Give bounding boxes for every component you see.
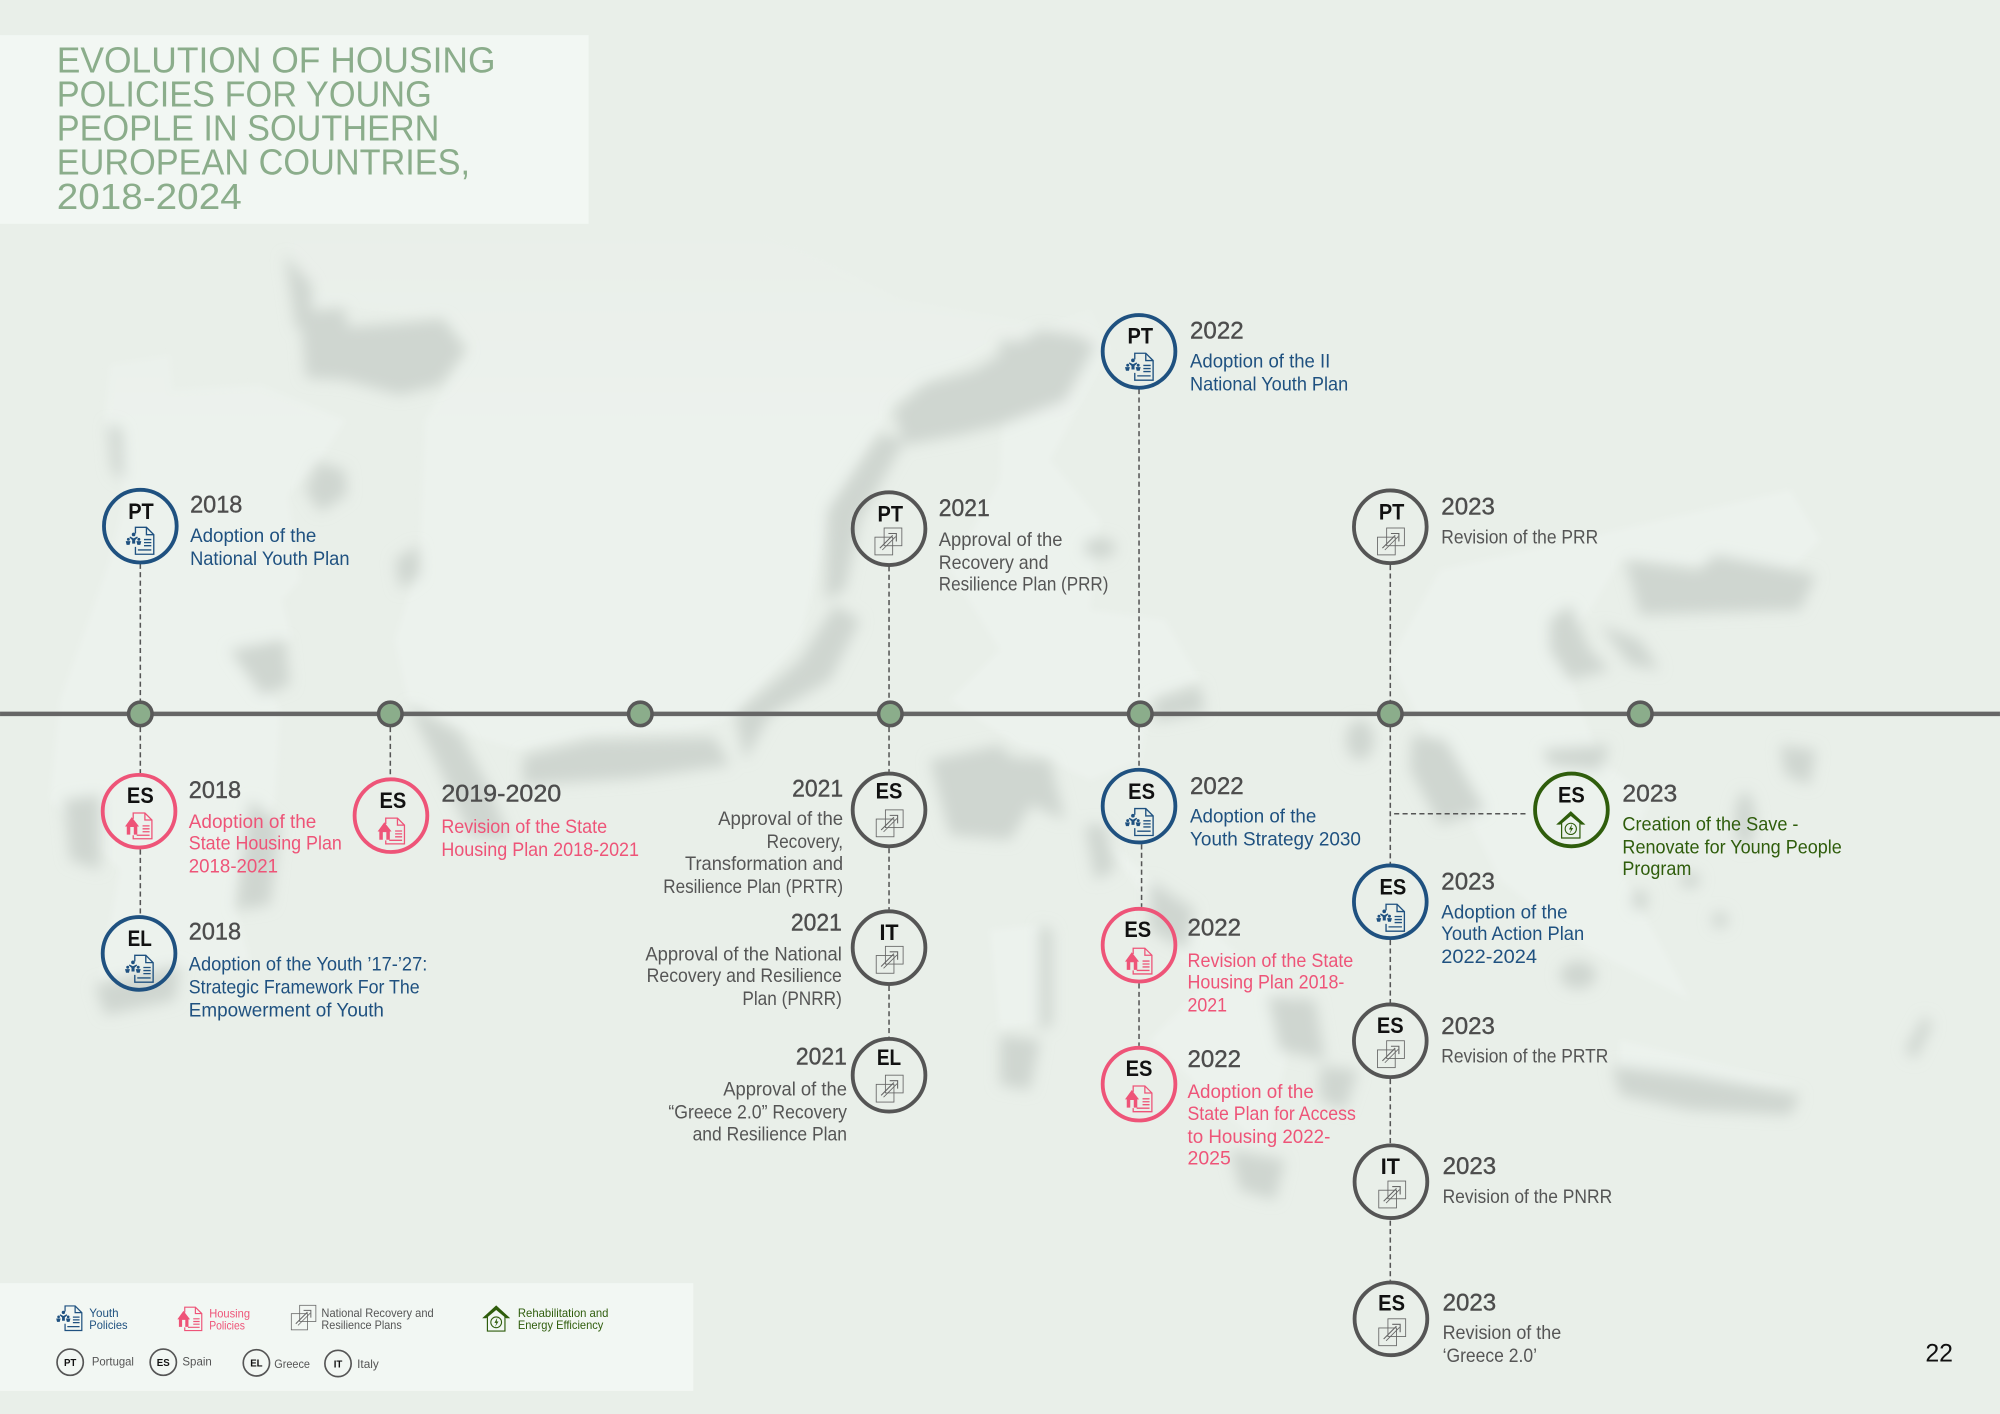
event: PT 2021: Recovery and — [939, 552, 1048, 574]
event: ES 2023 youth action plan: 2022-2024 — [1441, 946, 1537, 968]
title: PEOPLE IN SOUTHERN — [57, 109, 439, 149]
event: IT 2021: 2021 — [791, 909, 842, 936]
event: PT 2023: Revision of the PRR — [1441, 526, 1598, 548]
event: IT 2021: Plan (PNRR) — [742, 988, 842, 1010]
legend: housing policies: Policies — [209, 1319, 245, 1333]
event: EL 2018 — [103, 917, 427, 1022]
event: PT 2018: 2018 — [190, 492, 242, 519]
event: PT 2023: 2023 — [1441, 494, 1495, 521]
legend: Greece: EL — [250, 1359, 263, 1370]
event: ES 2021: Recovery, — [767, 831, 843, 853]
legend: rehabilitation and energy efficiency — [482, 1305, 609, 1332]
event: ES 2022 plan for access: to Housing 2022- — [1187, 1126, 1330, 1148]
legend: youth policies — [56, 1306, 128, 1332]
event: ES 2022 plan for access: ES — [1126, 1056, 1153, 1081]
event: ES 2023 youth action plan: Youth Action Plan — [1441, 923, 1584, 945]
legend: national recovery and resilience plans: Resilience Plans — [321, 1318, 402, 1332]
event: IT 2021: IT — [879, 920, 899, 945]
event: ES 2023 Save-Renovate: 2023 — [1622, 781, 1677, 808]
legend: Italy: IT — [334, 1359, 342, 1370]
event: ES 2018 housing plan: State Housing Plan — [189, 832, 342, 854]
event: ES 2023 revision Greece 2.0: ES — [1378, 1291, 1405, 1316]
legend: Portugal — [57, 1349, 134, 1375]
event: ES 2019-2020: Housing Plan 2018-2021 — [441, 839, 639, 861]
event: ES 2022 plan for access: 2022 — [1187, 1046, 1241, 1073]
legend: Spain: Spain — [182, 1354, 212, 1368]
event: PT 2022: PT — [1128, 324, 1153, 349]
event: EL 2021: 2021 — [796, 1043, 847, 1070]
title: EUROPEAN COUNTRIES, — [57, 143, 470, 183]
legend: Greece — [243, 1350, 310, 1376]
legend: rehabilitation and energy efficiency: Energy Efficiency — [518, 1318, 604, 1332]
event: ES 2021: 2021 — [792, 776, 843, 803]
legend: housing policies — [177, 1307, 250, 1333]
event: ES 2023 revision Greece 2.0 — [1355, 1282, 1561, 1367]
legend: Italy: Italy — [357, 1357, 380, 1371]
title: 2018-2024 — [57, 177, 242, 217]
event: ES 2023 revision Greece 2.0: ‘Greece 2.0’ — [1443, 1345, 1537, 1367]
event: PT 2022: Adoption of the II — [1190, 350, 1330, 372]
event: ES 2022 youth strategy: 2022 — [1190, 773, 1244, 800]
event: PT 2021: PT — [878, 502, 903, 527]
title — [57, 41, 496, 217]
legend: national recovery and resilience plans: National Recovery and — [321, 1306, 434, 1320]
event: ES 2022 revision housing plan: Housing Plan 2018- — [1187, 971, 1344, 993]
legend: housing policies: Housing — [209, 1307, 250, 1321]
event: PT 2022: National Youth Plan — [1190, 373, 1348, 395]
event: ES 2018 housing plan: ES — [127, 783, 154, 808]
event: ES 2019-2020: 2019-2020 — [441, 781, 561, 808]
event: PT 2018: National Youth Plan — [190, 548, 350, 570]
event: ES 2023 youth action plan: ES — [1379, 875, 1406, 900]
event: PT 2018: Adoption of the — [190, 525, 316, 547]
event: ES 2023 revision Greece 2.0: 2023 — [1443, 1290, 1496, 1317]
event: EL 2021: EL — [877, 1045, 901, 1070]
event: ES 2023 Save-Renovate: Renovate for Young People — [1622, 836, 1842, 858]
event: ES 2021: Approval of the — [718, 808, 843, 830]
event: ES 2023 revision Greece 2.0: Revision of the — [1443, 1322, 1561, 1344]
event: PT 2021 — [853, 492, 1108, 596]
event: ES 2022 revision housing plan: Revision of the State — [1187, 950, 1353, 972]
event: IT 2021 — [645, 909, 925, 1010]
timeline nodes — [129, 702, 1652, 726]
event: ES 2022 revision housing plan: 2021 — [1187, 994, 1227, 1016]
title: EVOLUTION OF HOUSING — [57, 41, 496, 81]
event: ES 2022 revision housing plan: ES — [1124, 917, 1151, 942]
event: IT 2023: Revision of the PNRR — [1443, 1186, 1612, 1208]
event: ES 2022 youth strategy: Adoption of the — [1190, 806, 1316, 828]
timeline axis — [0, 702, 2000, 726]
legend: Spain — [150, 1349, 212, 1375]
event: PT 2023: PT — [1379, 500, 1405, 525]
title: POLICIES FOR YOUNG — [57, 75, 432, 115]
event: IT 2023: 2023 — [1443, 1153, 1496, 1180]
event: PT 2022 — [1103, 315, 1348, 395]
legend: rehabilitation and energy efficiency: Rehabilitation and — [518, 1306, 609, 1320]
event: ES 2019-2020: ES — [379, 788, 406, 813]
event: ES 2022 youth strategy: Youth Strategy 2030 — [1190, 829, 1361, 851]
event: ES 2019-2020: Revision of the State — [441, 816, 607, 838]
legend: Portugal: PT — [64, 1358, 76, 1369]
event: ES 2023 revision PRTR — [1354, 1004, 1608, 1077]
event: ES 2018 housing plan: 2018 — [189, 777, 241, 804]
event: ES 2023 revision PRTR: Revision of the PRTR — [1441, 1045, 1608, 1067]
event: EL 2018: EL — [128, 926, 152, 951]
event: PT 2022: 2022 — [1190, 318, 1244, 345]
event: ES 2019-2020 — [355, 779, 639, 861]
legend: Spain: ES — [157, 1358, 170, 1369]
event: ES 2018 housing plan: Adoption of the — [189, 811, 316, 833]
event: ES 2022 plan for access — [1103, 1046, 1356, 1170]
event: EL 2021: Approval of the — [723, 1079, 847, 1101]
event: PT 2021: Approval of the — [939, 529, 1063, 551]
event: ES 2023 Save-Renovate: Creation of the Save - — [1622, 813, 1798, 835]
legend: youth policies: Youth — [89, 1306, 119, 1320]
event: ES 2022 youth strategy — [1103, 770, 1361, 851]
event: IT 2021: Recovery and Resilience — [647, 965, 842, 987]
event: EL 2018: Strategic Framework For The — [189, 977, 420, 999]
event: ES 2022 plan for access: 2025 — [1187, 1148, 1231, 1170]
event: ES 2023 youth action plan: 2023 — [1441, 869, 1495, 896]
event: PT 2021: 2021 — [939, 495, 990, 522]
event: EL 2021 — [668, 1039, 925, 1145]
event: IT 2023 — [1355, 1145, 1612, 1218]
event: EL 2018: Adoption of the Youth ’17-’27: — [189, 954, 427, 976]
event: EL 2021: and Resilience Plan — [693, 1123, 847, 1145]
event: IT 2023: IT — [1381, 1154, 1400, 1179]
background map of southern Europe — [50, 225, 1932, 1200]
event: ES 2021: Resilience Plan (PRTR) — [663, 876, 843, 898]
event: ES 2021: Transformation and — [685, 853, 843, 875]
legend: national recovery and resilience plans — [291, 1305, 434, 1332]
event: PT 2018 — [104, 490, 350, 570]
title panel — [0, 35, 589, 224]
event: ES 2023 youth action plan: Adoption of the — [1441, 901, 1568, 923]
dashed connectors — [140, 389, 1527, 1281]
event: ES 2022 plan for access: Adoption of the — [1187, 1081, 1314, 1103]
event: ES 2023 Save-Renovate: Program — [1622, 858, 1691, 880]
event: ES 2023 Save-Renovate: ES — [1558, 782, 1585, 807]
event: ES 2018 housing plan — [103, 775, 342, 877]
event: ES 2023 Save-Renovate — [1535, 774, 1842, 880]
legend: Greece: Greece — [274, 1357, 310, 1371]
legend: Italy — [325, 1350, 380, 1377]
page number: 22 — [1925, 1340, 1953, 1368]
event: EL 2021: “Greece 2.0” Recovery — [668, 1102, 847, 1124]
event: ES 2023 revision PRTR: 2023 — [1441, 1013, 1495, 1040]
legend panel — [0, 1283, 693, 1391]
event: ES 2021: ES — [876, 778, 903, 803]
legend: Portugal: Portugal — [92, 1354, 134, 1368]
event: EL 2018: Empowerment of Youth — [189, 1000, 384, 1022]
event: ES 2018 housing plan: 2018-2021 — [189, 855, 278, 877]
event: ES 2021 — [663, 774, 925, 898]
event: ES 2022 plan for access: State Plan for Access — [1187, 1103, 1356, 1125]
event: EL 2018: 2018 — [189, 918, 241, 945]
event: ES 2023 revision PRTR: ES — [1377, 1013, 1404, 1038]
event: IT 2021: Approval of the National — [645, 943, 842, 965]
event: ES 2022 youth strategy: ES — [1128, 779, 1155, 804]
event: PT 2021: Resilience Plan (PRR) — [939, 574, 1108, 596]
event: ES 2022 revision housing plan: 2022 — [1187, 915, 1241, 942]
event: ES 2023 youth action plan — [1354, 865, 1584, 968]
legend: youth policies: Policies — [89, 1318, 128, 1332]
event: PT 2018: PT — [128, 499, 154, 524]
event: PT 2023 — [1354, 490, 1598, 563]
event: ES 2022 revision housing plan — [1103, 909, 1353, 1016]
